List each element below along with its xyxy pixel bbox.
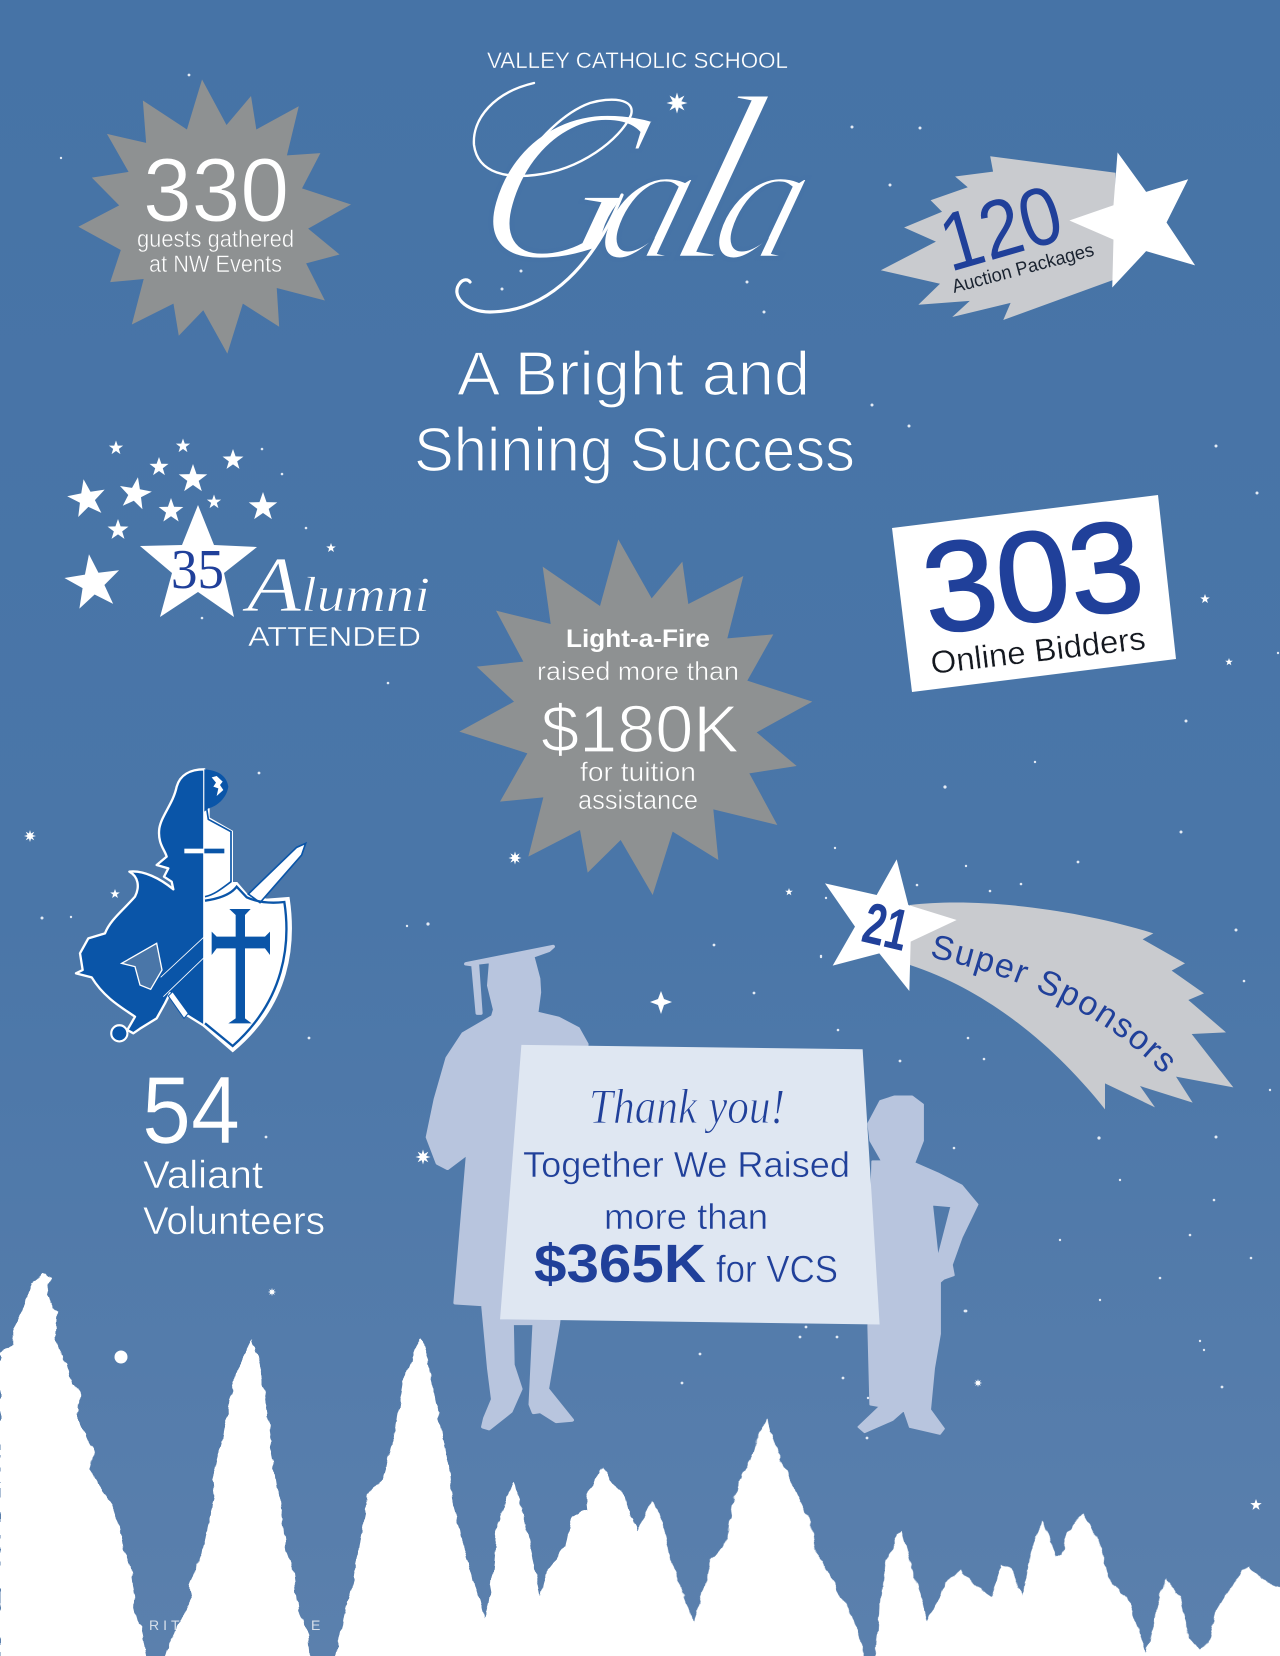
sword blade [248,843,306,903]
starburst: light-a-fire: $180K [541,692,739,767]
subtitle: A Bright and [457,340,810,409]
shooting star: 120 auction packages: 120 [930,168,1072,289]
starburst: light-a-fire: assistance [578,785,698,815]
title: Gala [451,48,852,312]
54 valiant volunteers [142,1057,325,1243]
helmet outline [205,808,231,897]
G flourish swashes [457,83,632,312]
card: 303 online bidders: 303 [915,493,1151,662]
title: Gala: a [695,105,836,295]
pommel fill [112,1026,126,1040]
starburst: light-a-fire: raised more than [537,656,739,686]
shield border [205,887,286,1046]
faint footer text [149,1617,320,1633]
subtitle: Shining Success [414,416,855,485]
feather highlight [212,776,223,796]
sword lines [161,937,204,997]
child silhouette [859,1097,977,1434]
sign text: for VCS [716,1249,838,1291]
plume right [204,769,228,812]
shooting star: 21 super sponsors: Super Sponsors [932,936,1173,1072]
starburst: 330 guests: guests gathered [137,226,294,253]
shooting star: 120 auction packages [881,152,1195,320]
cluster of small stars [62,438,277,610]
knight crest logo [76,769,306,1051]
faint footer text: RIT [149,1617,184,1633]
sword pommel [111,1025,127,1041]
title: Gala: l [649,48,790,310]
starburst: light-a-fire: for tuition [580,757,696,787]
school name: VALLEY CATHOLIC SCHOOL [487,48,788,73]
54 valiant volunteers: Valiant [143,1154,263,1197]
shooting star: 21 super sponsors [825,860,1234,1110]
sign text: Thank you! [589,1078,785,1134]
subtitle [414,340,855,485]
star cluster: 35 alumni: 35 [171,539,224,601]
sign text: $365K [534,1234,706,1294]
knight body [76,769,204,1033]
shooting star: 120 auction packages: Auction Packages [950,240,1096,298]
starburst: 330 guests [78,79,351,354]
visor slit [184,849,204,853]
starburst: 330 guests: 330 [143,141,289,241]
graduate silhouette [428,947,587,1429]
moon [114,1350,128,1364]
shield and helmet whites [204,808,291,1051]
snowy tree line [0,1274,1280,1656]
sign text: more than [604,1196,768,1237]
starburst: light-a-fire: Light-a-Fire [566,625,710,653]
54 valiant volunteers: 54 [142,1057,240,1164]
star cluster: 35 alumni: ATTENDED [248,621,421,652]
starburst: light-a-fire [459,539,812,895]
card: 303 online bidders: Online Bidders [929,620,1147,681]
large star [140,505,257,617]
star cluster: 35 alumni [62,438,430,652]
shooting star: 21 super sponsors: 21 [857,890,915,964]
sign board [500,1045,880,1324]
sign text [523,1078,850,1294]
sword guard [168,992,188,1018]
title: Gala: G [452,65,679,306]
card: 303 online bidders [892,493,1176,692]
silhouettes holding sign [428,947,977,1434]
star cluster: 35 alumni: Alumni [241,541,430,628]
arm gap [122,943,162,989]
54 valiant volunteers: Volunteers [143,1200,325,1243]
cross on shield [212,909,270,1023]
title: Gala: a [581,105,722,295]
faint footer text: E [311,1617,320,1633]
starburst: 330 guests: at NW Events [149,251,282,278]
sign text: Together We Raised [523,1144,850,1185]
